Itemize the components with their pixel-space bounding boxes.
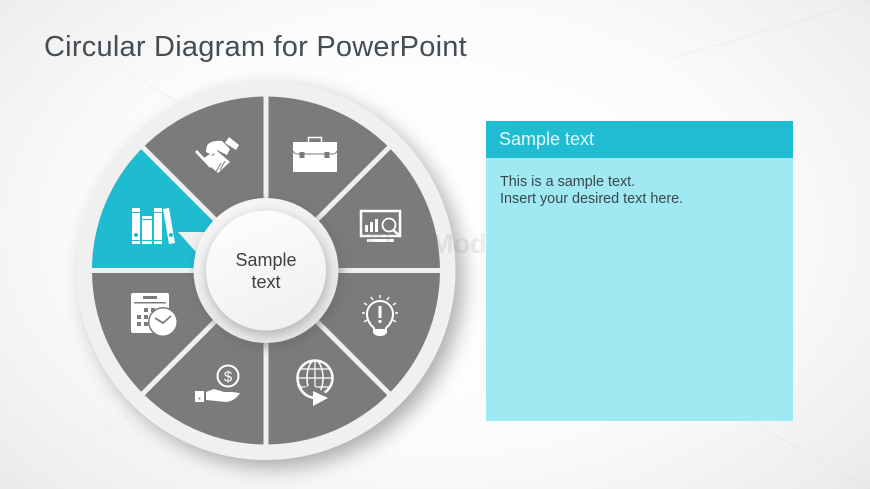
panel header — [486, 121, 793, 158]
hub label: Sample — [235, 250, 297, 270]
icon: hand with coin — [195, 366, 240, 402]
icon: light bulb — [362, 295, 398, 336]
icon: globe — [298, 360, 332, 406]
panel body text: Insert your desired text here. — [500, 190, 683, 206]
panel: sample text — [486, 121, 793, 421]
icon: handshake — [195, 137, 239, 173]
icon: hand with coin: $ — [224, 368, 233, 386]
panel body text — [500, 174, 683, 206]
highlighted segment — [92, 148, 266, 270]
title: Circular Diagram for PowerPoint — [44, 31, 467, 63]
icon: books — [132, 208, 175, 244]
icon: monitor — [361, 211, 400, 242]
panel header: Sample text — [499, 129, 594, 149]
segment dividers — [85, 90, 447, 451]
center hub — [194, 198, 342, 347]
pointer — [178, 232, 215, 262]
watermark logo — [342, 224, 364, 250]
gray segments — [92, 96, 440, 444]
outer ring — [76, 81, 463, 468]
panel body text: This is a sample text. — [500, 174, 635, 190]
watermark: SlideModel.com — [366, 228, 528, 259]
icon: briefcase — [293, 138, 337, 172]
hub label second line: text — [251, 272, 281, 292]
icon: calendar and clock — [131, 293, 178, 337]
